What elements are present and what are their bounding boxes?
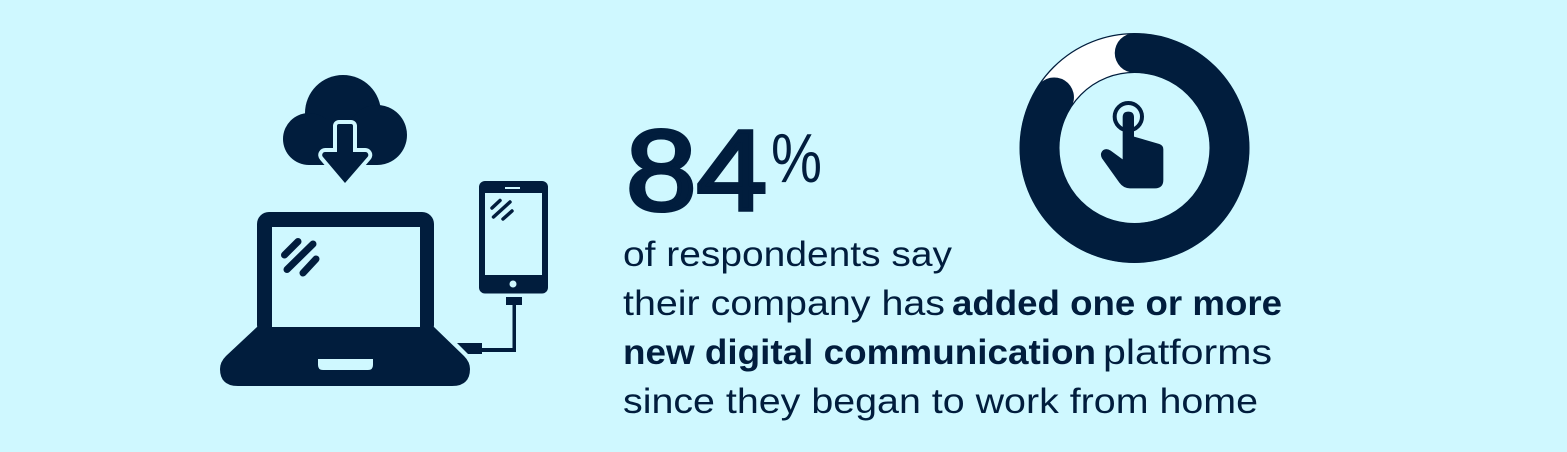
text: description: new digital communication <box>623 333 1096 372</box>
text: description: their company has <box>623 284 945 323</box>
text: description: added one or more <box>952 284 1282 323</box>
icon: cloud download <box>283 75 407 183</box>
icon: pointing hand <box>1101 103 1163 188</box>
icon: laptop <box>220 212 470 386</box>
icon: charging cable <box>457 297 522 354</box>
statistic: 84%: % <box>771 119 822 197</box>
icon: smartphone <box>479 181 548 294</box>
chart: donut 84% <box>1039 53 1230 243</box>
text: description: of respondents say <box>623 235 953 274</box>
statistic: 84% <box>626 108 822 235</box>
text: description: platforms <box>1103 333 1272 372</box>
text: description: since they began to work from home <box>623 382 1258 421</box>
statistic: 84%: 84 <box>626 108 767 235</box>
text: description <box>623 235 1282 421</box>
